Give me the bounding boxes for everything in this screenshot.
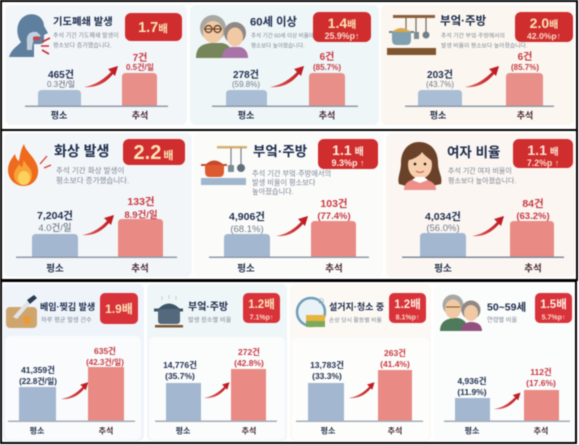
- icon: knife and board: [6, 295, 37, 328]
- bar chart: 평소: [430, 110, 446, 120]
- bar chart: [209, 198, 369, 274]
- subtitle: 하루 평균 발생 건수: [41, 316, 92, 324]
- panel: kitchen: [381, 5, 574, 125]
- icon: flame: [8, 144, 51, 186]
- panel: dishwashing and cleaning: [290, 284, 431, 441]
- bar chart: (59.8%): [232, 80, 260, 89]
- bar chart: 추석: [325, 264, 343, 274]
- badge: [389, 293, 426, 323]
- bar chart: (77.4%): [317, 211, 351, 222]
- bar chart: 41,359건: [21, 365, 55, 375]
- bar chart: (68.1%): [230, 224, 264, 235]
- bar chart: 0.5건/일: [126, 62, 154, 72]
- bar chart: 추석: [319, 110, 335, 120]
- description: [441, 32, 528, 50]
- title: 기도폐쇄 발생: [53, 15, 113, 28]
- badge: 7.2%p ↑: [527, 158, 559, 168]
- bar chart: (35.7%): [165, 371, 195, 381]
- title: 설거지·청소 중: [329, 301, 384, 312]
- badge: 25.9%p↑: [325, 31, 359, 41]
- bar chart: (85.7%): [511, 63, 539, 72]
- badge: 42.0%p↑: [527, 31, 561, 41]
- description: 평소보다 증가했습니다.: [53, 42, 112, 50]
- bar chart: [16, 196, 177, 274]
- description: 추석 기간 부엌·주방에서의: [252, 169, 331, 178]
- bar chart: (43.7%): [426, 80, 454, 89]
- bar chart: 203건: [427, 69, 453, 81]
- bar chart: 평소: [176, 426, 191, 436]
- bar chart: 133건: [127, 196, 155, 208]
- badge: 1.2배: [248, 297, 275, 311]
- bar chart: 4.0건/일: [38, 222, 72, 234]
- badge: 5.7%p↑: [542, 314, 565, 322]
- arrow: [61, 382, 88, 399]
- bar chart: 272건: [238, 347, 260, 357]
- description: 추석 기간 화상 발생이: [56, 165, 124, 175]
- bar chart: 평소: [238, 110, 254, 120]
- description: [252, 169, 331, 196]
- badge: 1.9배: [105, 302, 133, 316]
- arrow: [270, 66, 304, 87]
- title: 화상 발생: [54, 143, 109, 159]
- arrow: [82, 215, 114, 235]
- bar chart: 13,783건: [310, 360, 344, 370]
- bar chart: (41.4%): [380, 359, 410, 369]
- icon: woman: [398, 142, 441, 190]
- badge: [123, 139, 185, 165]
- badge: [535, 293, 572, 323]
- badge: [318, 139, 378, 169]
- badge: [513, 139, 573, 168]
- description: [251, 32, 314, 50]
- badge: 1.1 배: [527, 142, 559, 158]
- badge: 2.0배: [530, 15, 558, 31]
- bar chart: 추석: [517, 110, 533, 120]
- bar chart: [405, 51, 554, 120]
- bar chart: 263건: [384, 348, 406, 358]
- bar chart: 6건: [320, 51, 334, 63]
- panel: female share: [386, 133, 575, 277]
- title: 50~59세: [487, 300, 526, 314]
- bar chart: 추석: [534, 426, 548, 436]
- bar chart: (17.6%): [526, 378, 556, 388]
- badge: 9.3%p ↑: [331, 158, 365, 168]
- badge: [313, 12, 371, 42]
- title: 60세 이상: [250, 16, 297, 28]
- bar chart: 8.9건/일: [124, 209, 158, 221]
- bar chart: (42.3건/일): [86, 357, 124, 367]
- icon: head airway: [9, 14, 50, 57]
- bar chart: 추석: [388, 426, 402, 436]
- description: 추석 기간 여자 비율이: [448, 166, 512, 175]
- row 2 frame: [1, 130, 577, 280]
- bar chart: 4,936건: [457, 376, 487, 386]
- bar chart: [444, 367, 570, 436]
- bar chart: 465건: [48, 69, 74, 81]
- subtitle: 연령별 비율: [487, 316, 517, 324]
- bar chart: 추석: [131, 264, 149, 274]
- subtitle: 손상 당시 활동별 비율: [329, 316, 382, 324]
- panel: burns: [4, 133, 192, 277]
- bar chart: [25, 52, 168, 120]
- arrow: [84, 66, 118, 87]
- subtitle: 발생 장소별 비율: [188, 316, 232, 324]
- bar chart: 7,204건: [37, 210, 73, 222]
- arrow: [472, 216, 504, 236]
- description: [448, 166, 516, 185]
- bar chart: (22.8건/일): [19, 376, 57, 386]
- bar chart: 112건: [530, 367, 552, 377]
- bar chart: 278건: [233, 69, 259, 81]
- badge: [125, 13, 182, 41]
- description: [53, 32, 119, 50]
- bar chart: 평소: [30, 426, 45, 436]
- bar chart: (42.8%): [234, 358, 264, 368]
- bar chart: 평소: [321, 426, 336, 436]
- panel: kitchen location: [147, 284, 287, 441]
- icon: sponge and bubble: [297, 298, 325, 327]
- badge: 1.7배: [138, 20, 168, 36]
- description: 추석 기간 60세 이상 비율이: [251, 32, 314, 40]
- panel: ages 50 to 59: [434, 284, 574, 441]
- bar chart: (85.7%): [313, 63, 341, 72]
- badge: 2.2배: [134, 142, 173, 164]
- bar chart: 추석: [242, 426, 256, 436]
- title: 부엌·주방: [253, 144, 308, 159]
- icon: steaming pot: [154, 295, 183, 328]
- badge: 8.1%p↑: [396, 314, 419, 322]
- bar chart: (33.3%): [312, 371, 342, 381]
- description: 추석 기간 부엌·주방에서의: [441, 32, 505, 40]
- arrow: [204, 382, 230, 398]
- bar chart: 103건: [320, 198, 348, 210]
- description: [56, 165, 129, 185]
- description: 추석 기간 기도폐쇄 발생이: [53, 32, 119, 40]
- badge: 1.5배: [540, 297, 567, 311]
- description: 높아졌습니다.: [252, 187, 294, 196]
- title: 여자 비율: [447, 145, 500, 160]
- bar chart: 평소: [46, 264, 64, 274]
- bar chart: (11.9%): [457, 387, 487, 397]
- description: 평소보다 증가했습니다.: [56, 175, 129, 185]
- icon: older couple: [440, 294, 482, 331]
- badge: [243, 293, 280, 323]
- bar chart: 0.3건/일: [47, 79, 75, 89]
- badge: [100, 293, 138, 324]
- bar chart: 84건: [522, 198, 544, 210]
- description: 평소보다 높아졌습니다.: [251, 42, 305, 50]
- bar chart: 14,776건: [163, 360, 197, 370]
- bar chart: [212, 51, 358, 120]
- bar chart: 평소: [237, 264, 255, 274]
- bar chart: 평소: [51, 110, 67, 120]
- bar chart: 4,906건: [229, 211, 265, 223]
- arrow: [276, 216, 308, 236]
- bar chart: 추석: [524, 264, 542, 274]
- bar chart: [155, 347, 277, 436]
- icon: stove and pot: [201, 146, 247, 185]
- bar chart: [402, 198, 564, 274]
- icon: kitchen rack and pot: [387, 15, 436, 55]
- title: 베임·찢김 발생: [40, 301, 95, 312]
- icon: elderly couple: [196, 15, 248, 58]
- bar chart: [296, 348, 423, 436]
- row 1 frame: [1, 1, 577, 130]
- bar chart: (56.0%): [426, 223, 460, 234]
- bar chart: 평소: [434, 264, 452, 274]
- bar chart: 635건: [94, 346, 116, 356]
- bar chart: 6건: [518, 51, 532, 63]
- panel: age 60 and over: [190, 5, 379, 125]
- arrow: [465, 66, 499, 87]
- bar chart: 4,034건: [425, 211, 461, 223]
- badge: 7.1%p↑: [250, 314, 273, 322]
- panel: cuts: [3, 284, 144, 441]
- row 3 frame: [1, 281, 576, 443]
- badge: 1.2배: [394, 297, 421, 311]
- bar chart: 7건: [133, 52, 147, 64]
- title: 부엌·주방: [440, 14, 487, 28]
- badge: 1.4배: [328, 15, 356, 31]
- bar chart: 추석: [99, 426, 113, 436]
- description: 발생 비율이 평소보다: [252, 178, 316, 187]
- title: 부엌·주방: [188, 300, 228, 313]
- bar chart: [8, 346, 135, 436]
- description: 평소보다 높아졌습니다.: [448, 176, 516, 185]
- bar chart: (63.2%): [516, 211, 550, 222]
- badge: 1.1 배: [332, 142, 364, 158]
- arrow: [349, 382, 374, 398]
- description: 발생 비율이 평소보다 높아졌습니다.: [441, 42, 528, 50]
- panel: airway obstruction: [5, 5, 187, 125]
- bar chart: 추석: [132, 110, 148, 120]
- panel: kitchen share: [194, 133, 383, 277]
- arrow: [494, 393, 521, 409]
- badge: [515, 12, 573, 42]
- bar chart: 평소: [465, 426, 480, 436]
